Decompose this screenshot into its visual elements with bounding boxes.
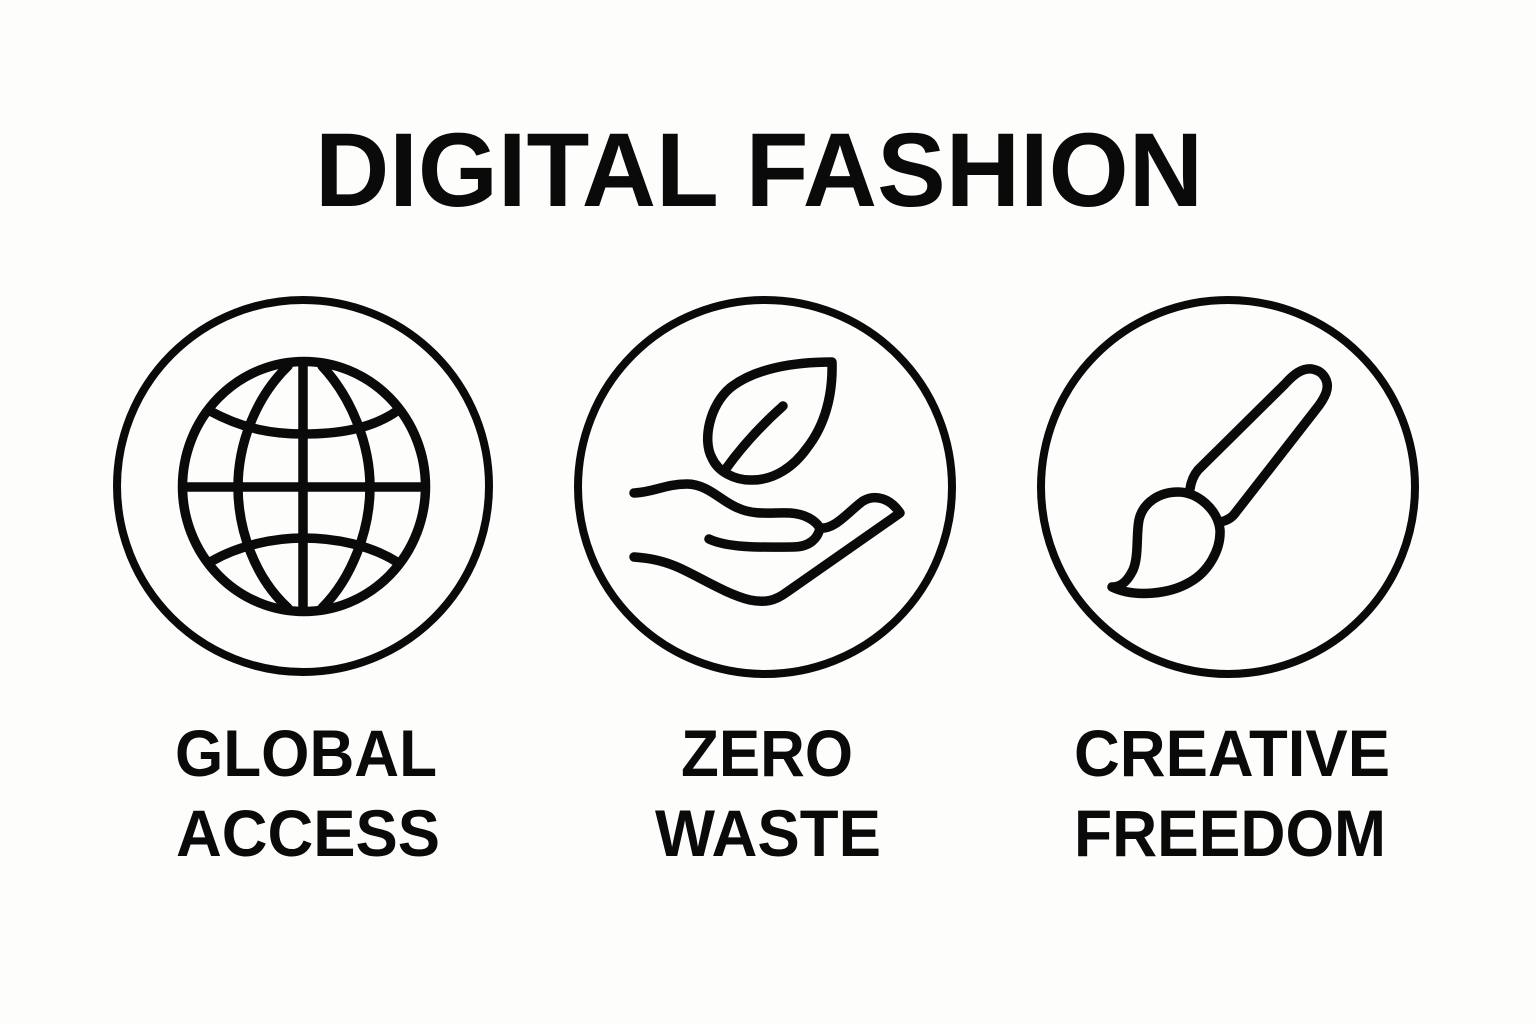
icon: globe in circle [117, 300, 489, 672]
panel: global access [117, 300, 489, 870]
label: global access: ACCESS [176, 796, 440, 870]
label: global access [175, 716, 440, 870]
label: creative freedom: CREATIVE [1074, 716, 1390, 790]
icon: leaf over hand in circle [578, 300, 952, 674]
label: creative freedom: FREEDOM [1074, 796, 1386, 870]
icon: paintbrush in circle [1041, 300, 1415, 674]
panel: zero waste [578, 300, 952, 870]
label: zero waste: ZERO [681, 716, 853, 790]
label: zero waste [655, 716, 881, 870]
label: creative freedom [1074, 716, 1390, 870]
panel: creative freedom [1041, 300, 1415, 870]
label: global access: GLOBAL [175, 716, 437, 790]
title: DIGITAL FASHION [315, 112, 1203, 229]
label: zero waste: WASTE [655, 796, 881, 870]
